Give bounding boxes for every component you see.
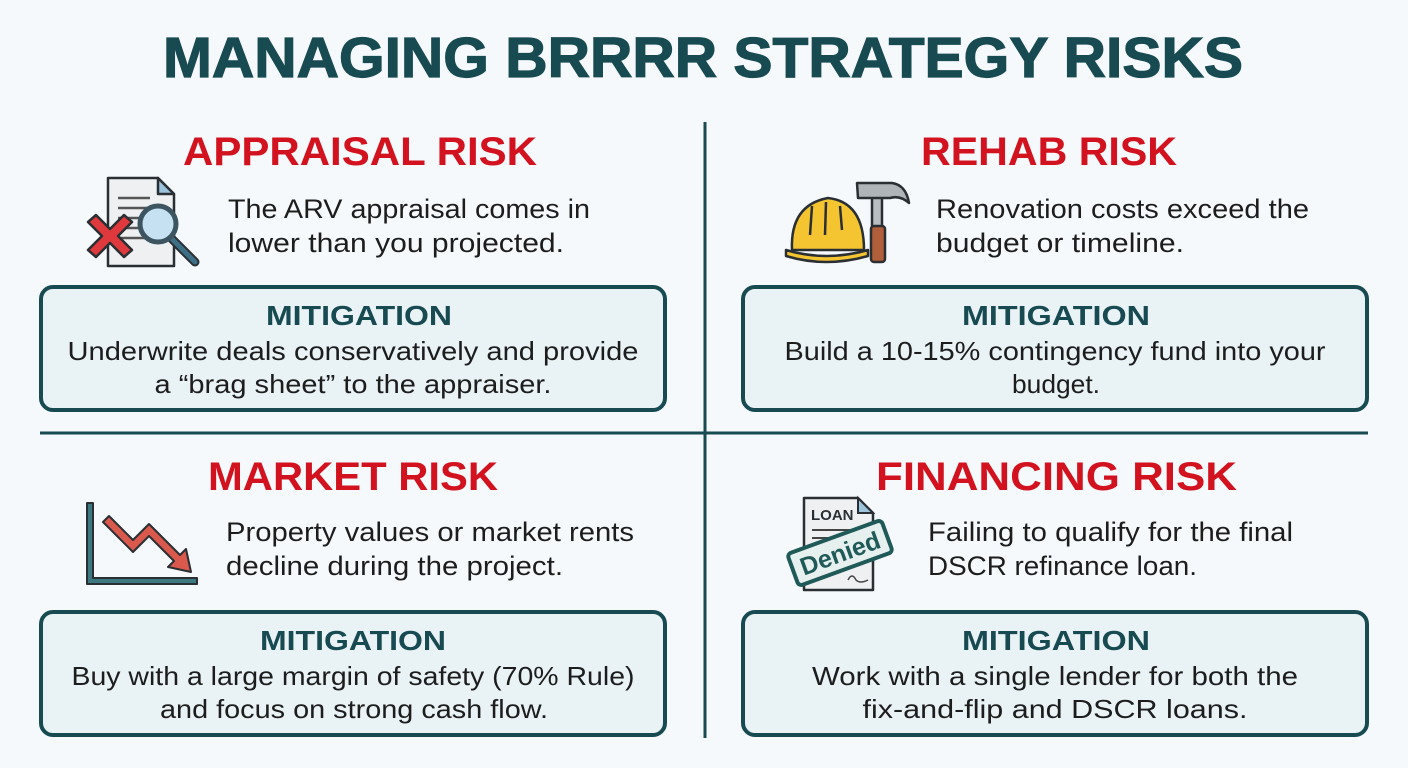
panel: rehab risk: budget or timeline.	[936, 228, 1184, 258]
panel: appraisal risk	[41, 130, 665, 410]
icon: denied loan document	[787, 498, 893, 590]
description: Property values or market rents	[226, 517, 634, 547]
panel: market risk	[41, 455, 665, 735]
mitigation box: a “brag sheet” to the appraiser.	[154, 369, 552, 399]
panel: financing risk: DSCR refinance loan.	[928, 551, 1197, 581]
icon: denied loan document: LOAN	[811, 507, 854, 524]
heading: rehab risk: REHAB RISK	[921, 130, 1177, 174]
mitigation box	[743, 287, 1367, 410]
mitigation box: Buy with a large margin of safety (70% Rule)	[72, 661, 634, 691]
mitigation box: MITIGATION	[962, 300, 1150, 331]
mitigation box: MITIGATION	[266, 300, 452, 331]
mitigation box: and focus on strong cash flow.	[160, 694, 548, 724]
title: MANAGING BRRRR STRATEGY RISKS	[163, 26, 1243, 90]
mitigation box: Underwrite deals conservatively and provide	[68, 336, 638, 366]
mitigation box: fix-and-flip and DSCR loans.	[862, 694, 1248, 724]
mitigation box: Build a 10-15% contingency fund into your	[784, 336, 1326, 366]
icon: declining chart	[87, 503, 197, 584]
mitigation box: MITIGATION	[962, 625, 1150, 656]
description: Failing to qualify for the final	[928, 517, 1293, 547]
mitigation box: budget.	[1012, 369, 1100, 399]
icon: denied loan document: Denied	[796, 527, 884, 581]
description: Renovation costs exceed the	[936, 194, 1309, 224]
mitigation box	[41, 287, 665, 410]
mitigation box	[743, 612, 1367, 735]
heading: financing risk: FINANCING RISK	[876, 455, 1237, 499]
panel: financing risk	[743, 455, 1367, 735]
icon: helmet and hammer	[786, 183, 909, 262]
mitigation box	[41, 612, 665, 735]
description: The ARV appraisal comes in	[228, 194, 590, 224]
panel: appraisal risk: lower than you projected.	[228, 228, 564, 258]
heading: market risk: MARKET RISK	[208, 455, 498, 499]
panel: market risk: decline during the project.	[226, 551, 563, 581]
panel: rehab risk	[743, 130, 1367, 410]
icon: document with magnifier	[88, 178, 195, 266]
heading: appraisal risk: APPRAISAL RISK	[183, 130, 537, 174]
mitigation box: MITIGATION	[260, 625, 446, 656]
mitigation box: Work with a single lender for both the	[812, 661, 1298, 691]
